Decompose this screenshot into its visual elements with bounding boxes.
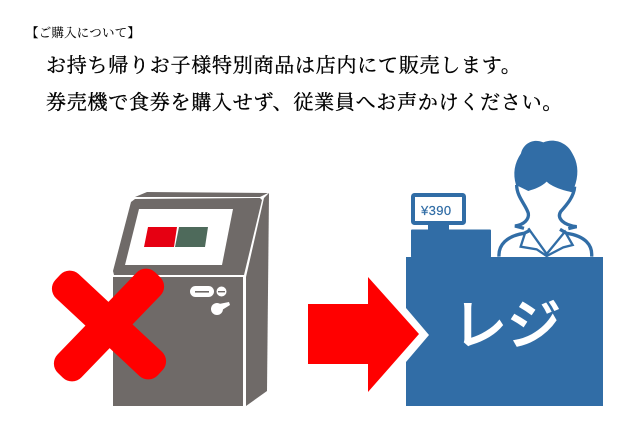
panel: register counter [406,257,603,406]
price: ¥390 [420,203,452,218]
green screen button [175,227,208,247]
text block: notice [46,54,563,114]
machine screen [125,209,233,265]
machine front [113,277,243,406]
counter label: レジ [453,296,561,356]
register display [413,195,464,223]
machine top edge [135,192,268,197]
machine side [246,193,269,406]
cashier collar [521,228,573,256]
cashier shoulders [499,229,592,257]
notice line 2: 券売機で食券を購入せず、従業員へお声かけください。 [46,91,563,114]
ticket knob [211,302,230,315]
coin slot [190,286,226,297]
icon: ticket machine [113,192,269,406]
icon: cashier [499,141,592,257]
icon: cash register [411,195,491,258]
notice line 1: お持ち帰りお子様特別商品は店内にて販売します。 [46,54,522,77]
cashier hair [514,141,577,192]
cashier neck and side hair outline [515,185,577,229]
register body [411,230,491,258]
arrow [308,277,419,392]
heading: about purchase: 【ご購入について】 [26,25,140,40]
machine upper panel [113,198,262,275]
icon: red cross [47,263,171,387]
counter block [406,257,603,406]
red screen button [144,227,177,247]
register neck [428,225,449,230]
